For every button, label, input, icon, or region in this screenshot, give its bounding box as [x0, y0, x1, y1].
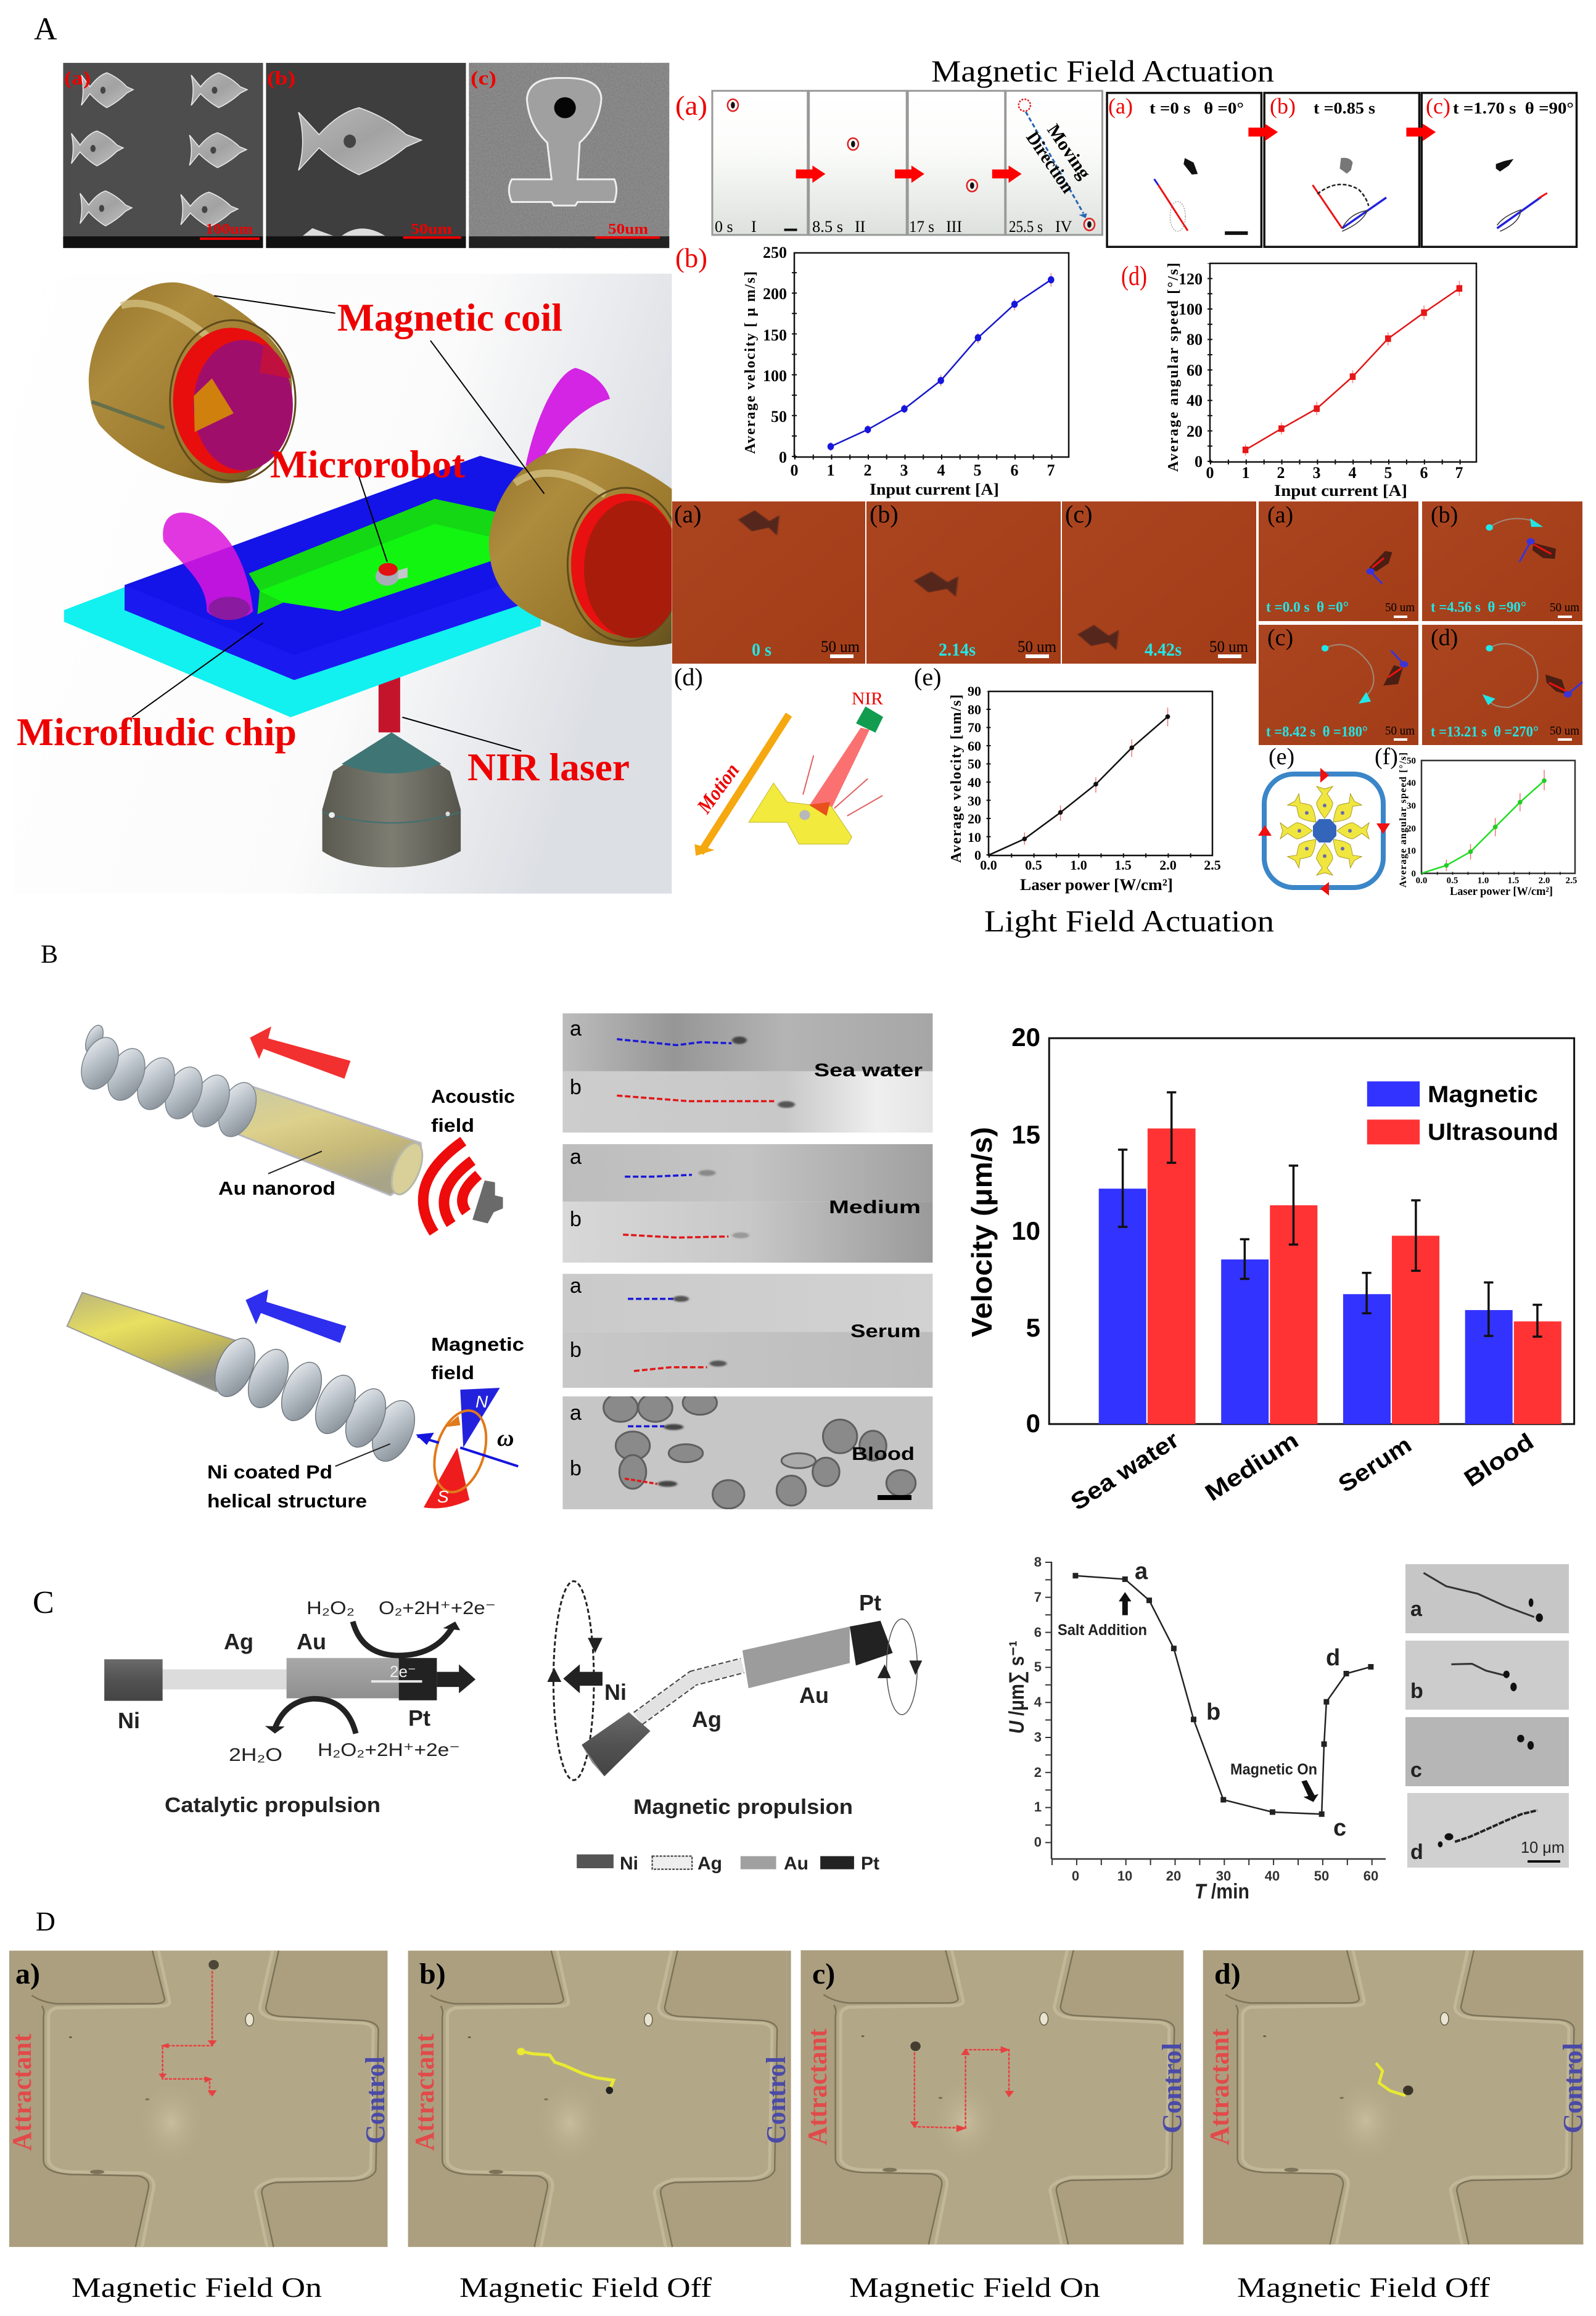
- material legend: Ag: [697, 1853, 722, 1874]
- catalytic propulsion diagram: [104, 1598, 496, 1817]
- arrow: oxidation reaction: [353, 1622, 460, 1655]
- line chart: average angular speed vs input current: 60: [1187, 361, 1203, 379]
- line chart: speed vs time: d: [1326, 1645, 1340, 1671]
- light-driven rotation images: 50 um: [1385, 601, 1415, 614]
- line chart: average velocity vs laser power: 10: [968, 830, 981, 845]
- light-driven rotation images: (b): [1431, 502, 1458, 528]
- SEM images of fish microrobots: 50um: [411, 221, 452, 237]
- light-driven translation images: 2.14s: [939, 640, 976, 660]
- line chart: average angular speed vs laser power: 0.5: [1447, 876, 1458, 886]
- line chart: speed vs time: 20: [1166, 1868, 1181, 1884]
- line chart: speed vs time: 3: [1034, 1729, 1042, 1745]
- magnetic helical robot: Ni coated Pd: [207, 1461, 332, 1483]
- green channel: [249, 499, 498, 614]
- line chart: speed vs time: U /μm∑ s⁻¹: [1005, 1641, 1029, 1734]
- line chart: average velocity vs input current: (b): [675, 243, 707, 273]
- line chart: average angular speed vs laser power: 1.0: [1478, 876, 1489, 886]
- 3D setup: coils, microfluidic chip and NIR laser: [13, 274, 683, 894]
- line chart: average velocity vs laser power: 0.5: [1025, 857, 1042, 873]
- catalytic propulsion diagram: Ag: [224, 1629, 253, 1654]
- magnetic translation time series: 17 s: [909, 218, 934, 236]
- line chart: average velocity vs input current: 3: [900, 461, 908, 479]
- micrograph c: field on: c): [812, 1958, 835, 1990]
- line chart: speed vs time: 7: [1034, 1589, 1042, 1605]
- rotation orbit at Pt end: [887, 1619, 917, 1715]
- line chart: average angular speed vs laser power: 30: [1407, 801, 1416, 811]
- micrograph d: field off: d): [1214, 1958, 1241, 1990]
- chart frame: [1049, 1038, 1574, 1424]
- acoustic helical robot: field: [431, 1115, 474, 1136]
- magnetic propulsion diagram: Pt: [859, 1590, 881, 1615]
- line chart: speed vs time: 30: [1216, 1868, 1231, 1884]
- 3D setup: coils, microfluidic chip and NIR laser: Microfludic chip: [17, 710, 297, 754]
- arrow: electron flow: [371, 1680, 422, 1683]
- icon: magnetic coil left: [89, 282, 295, 483]
- schematic: fish rotation ring: [1258, 744, 1390, 896]
- line chart: average velocity vs laser power: 60: [968, 738, 981, 754]
- catalytic propulsion diagram: O₂+2H⁺+2e⁻: [379, 1598, 496, 1618]
- icon: magenta tube right: [525, 368, 610, 466]
- line chart: average velocity vs input current: 2: [863, 461, 872, 479]
- rotation arrowheads: [547, 1638, 922, 1682]
- magnetic translation time series: 0 s: [715, 218, 733, 236]
- SEM images of fish microrobots: (c): [471, 67, 496, 89]
- micrograph tracks: blood: [562, 1391, 932, 1509]
- micrograph b: field off: Attractant: [409, 2034, 440, 2151]
- icon: nanowire: [104, 1658, 437, 1701]
- SEM images of fish microrobots: (a): [64, 67, 91, 89]
- icon: microrobot: [376, 563, 408, 586]
- icon: gold nanorod: [223, 1087, 429, 1198]
- bar chart: velocity in each medium: 0: [1026, 1409, 1040, 1438]
- line chart: average angular speed vs laser power: 1.5: [1508, 876, 1519, 886]
- line chart: average angular speed vs laser power: 50: [1407, 756, 1416, 766]
- schematic: fish rotation ring: (e): [1269, 744, 1294, 770]
- line chart: average angular speed vs input current: 3: [1312, 464, 1321, 482]
- micrographs a-d of nanowire trajectories: 10 μm: [1521, 1838, 1565, 1857]
- line chart: average angular speed vs laser power: 0.0: [1416, 876, 1427, 886]
- light-driven rotation images: 50 um: [1550, 601, 1579, 614]
- line chart: average angular speed vs input current: 7: [1455, 464, 1463, 482]
- magnetic helical robot: helical structure: [207, 1490, 367, 1512]
- line chart: average velocity vs input current: 200: [763, 285, 787, 303]
- line chart: average angular speed vs laser power: Average angular speed [°/s]: [1398, 752, 1409, 888]
- arrow: reduction reaction: [265, 1699, 356, 1734]
- catalytic propulsion diagram: Au: [297, 1629, 326, 1654]
- schematic: NIR-driven fish motion: [674, 663, 883, 856]
- micrograph tracks: sea water: b: [570, 1076, 582, 1099]
- icon: transducer: [472, 1181, 503, 1224]
- micrograph b: field off: [408, 1951, 791, 2303]
- bar chart: velocity in each medium: Serum: [1334, 1432, 1417, 1498]
- line chart: average angular speed vs laser power: 0: [1411, 869, 1416, 879]
- 3D setup: coils, microfluidic chip and NIR laser: Magnetic coil: [337, 295, 562, 339]
- line chart: average velocity vs input current: 100: [763, 367, 787, 385]
- light-driven rotation images: (c): [1267, 625, 1293, 651]
- blue chip body: [125, 456, 537, 680]
- micrograph tracks: serum: [562, 1274, 932, 1388]
- line chart: average velocity vs laser power: 20: [968, 811, 981, 826]
- catalytic propulsion diagram: Ni: [118, 1708, 140, 1733]
- magnetic translation time series: (a): [675, 91, 707, 121]
- line chart: average velocity vs input current: Input current [A]: [870, 480, 999, 498]
- micrograph b: field off: Control: [761, 2056, 791, 2144]
- micrograph d: field off: [1203, 1950, 1588, 2303]
- catalytic propulsion diagram: Catalytic propulsion: [165, 1794, 380, 1817]
- line chart: average velocity vs laser power: [914, 663, 1221, 894]
- line chart: average angular speed vs laser power: (f): [1375, 744, 1398, 770]
- light-driven rotation images: 50 um: [1385, 724, 1415, 738]
- line chart: average angular speed vs input current: 6: [1420, 464, 1428, 482]
- magnetic translation time series: 8.5 s: [812, 218, 843, 236]
- line chart: average angular speed vs laser power: 20: [1407, 824, 1416, 834]
- line chart: average angular speed vs input current: Average angular speed [°/s]: [1166, 263, 1182, 472]
- legend swatches: [1367, 1081, 1420, 1144]
- micrograph tracks: medium: a: [570, 1145, 582, 1169]
- line chart: speed vs time: 2: [1034, 1765, 1042, 1780]
- line chart: average angular speed vs laser power: 2.5: [1566, 876, 1577, 886]
- line chart: average velocity vs input current: 150: [763, 326, 787, 344]
- line chart: average angular speed vs input current: 20: [1187, 422, 1203, 440]
- bar chart: velocity in each medium: 15: [1011, 1120, 1040, 1149]
- line chart: average angular speed vs input current: 120: [1178, 270, 1203, 288]
- line chart: average velocity vs input current: 250: [763, 244, 787, 262]
- line chart: average velocity vs input current: Average velocity [ μ m/s]: [742, 271, 759, 454]
- micrograph a: field on: [7, 1951, 390, 2303]
- line chart: average velocity vs input current: 0: [779, 448, 787, 466]
- line chart: average angular speed vs laser power: [1375, 744, 1577, 898]
- icon: gold nanorod: [67, 1293, 244, 1391]
- micrograph b: field off: b): [419, 1958, 446, 1990]
- line chart: average angular speed vs input current: 40: [1187, 392, 1203, 410]
- line chart: average velocity vs laser power: 2.0: [1159, 857, 1177, 873]
- light-driven translation images: (c): [1065, 500, 1092, 528]
- magnetic translation time series: II: [855, 218, 865, 236]
- light-driven translation images: (b): [870, 500, 899, 528]
- micrograph tracks: sea water: [562, 1013, 932, 1132]
- magnetic propulsion diagram: [547, 1581, 922, 1819]
- line chart: average velocity vs laser power: 90: [968, 683, 981, 699]
- magnetic helical robot: N: [475, 1392, 488, 1411]
- cyan base plate: [64, 587, 541, 717]
- bar chart: velocity in each medium: 20: [1011, 1023, 1040, 1052]
- light-driven translation images: 50 um: [1018, 638, 1056, 656]
- magnetic rotation time series: t =0 s θ =0°: [1150, 99, 1244, 117]
- icon: rotating magnet: [416, 1388, 518, 1509]
- section label D: D: [36, 1906, 56, 1937]
- line chart: speed vs time: 5: [1034, 1659, 1042, 1675]
- line chart: speed vs time: 6: [1034, 1625, 1042, 1640]
- line chart: average angular speed vs input current: 100: [1178, 300, 1203, 318]
- line chart: average velocity vs laser power: 50: [968, 756, 981, 772]
- panel C: Ni-Ag-Au-Pt nanowire motors: [33, 1554, 1569, 1903]
- magnetic helical robot: [67, 1290, 524, 1512]
- line chart: average velocity vs input current: 7: [1047, 461, 1055, 479]
- SEM images of fish microrobots: (b): [267, 67, 295, 89]
- magnetic rotation time series: [1107, 93, 1577, 247]
- catalytic propulsion diagram: 2H₂O: [229, 1745, 282, 1765]
- line chart: average velocity vs laser power: 0.0: [980, 857, 997, 873]
- icon: helix: [207, 1332, 423, 1468]
- line chart: average angular speed vs input current: 0: [1206, 464, 1214, 482]
- micrograph tracks: serum: b: [570, 1338, 582, 1362]
- light-driven translation images: 4.42s: [1145, 640, 1182, 660]
- magnetic rotation time series: (b): [1270, 94, 1296, 118]
- heading: Light Field Actuation: Light Field Actuation: [984, 904, 1274, 938]
- micrographs a-d of nanowire trajectories: d: [1410, 1840, 1423, 1864]
- micrograph a: field on: Attractant: [7, 2034, 37, 2151]
- magnetic helical robot: field: [431, 1362, 474, 1383]
- schematic: NIR-driven fish motion: NIR: [852, 690, 883, 709]
- material legend: Pt: [861, 1853, 879, 1874]
- ultrasound bars: [1148, 1129, 1561, 1424]
- magnetic rotation time series: t =1.70 s θ =90°: [1453, 99, 1574, 117]
- micrograph tracks: medium: [562, 1144, 932, 1263]
- micrograph tracks: sea water: Sea water: [814, 1060, 923, 1081]
- micrograph tracks: blood: Blood: [852, 1444, 915, 1464]
- micrograph tracks: medium: b: [570, 1208, 582, 1231]
- SEM images of fish microrobots: 50um: [608, 221, 648, 237]
- line chart: average velocity vs input current: 1: [826, 461, 835, 479]
- line chart: average angular speed vs input current: 5: [1384, 464, 1392, 482]
- line chart: average velocity vs laser power: Laser power [W/cm²]: [1020, 876, 1173, 894]
- micrograph c: field on: Attractant: [802, 2029, 833, 2145]
- micrograph d: field off: Control: [1558, 2043, 1588, 2133]
- caption: Magnetic Field On: [849, 2272, 1100, 2303]
- magnetic translation time series: [675, 91, 1102, 236]
- line chart: average angular speed vs input current: 1: [1242, 464, 1249, 482]
- line chart: average velocity vs laser power: 1.5: [1114, 857, 1132, 873]
- line chart: speed vs time: 50: [1314, 1868, 1329, 1884]
- line chart: speed vs time: 60: [1364, 1868, 1378, 1884]
- icon: magenta tube left: [163, 513, 253, 620]
- section label A: A: [34, 12, 57, 47]
- line chart: speed vs time: 0: [1072, 1868, 1079, 1884]
- magnetic rotation time series: (a): [1108, 94, 1133, 118]
- arrow: magnetic propulsion direction: [563, 1664, 603, 1693]
- catalytic propulsion diagram: H₂O₂: [306, 1598, 355, 1618]
- line chart: average velocity vs input current: [675, 243, 1069, 498]
- 3D setup: coils, microfluidic chip and NIR laser: Microrobot: [270, 442, 466, 486]
- magnetic propulsion diagram: Au: [799, 1683, 829, 1708]
- leader lines: [132, 296, 544, 751]
- line chart: speed vs time: c: [1333, 1815, 1346, 1841]
- micrograph a: field on: a): [15, 1958, 40, 1990]
- light-driven translation images: [672, 500, 1256, 664]
- bar chart: velocity in each medium: 10: [1011, 1216, 1040, 1245]
- SEM images of fish microrobots: 100um: [205, 221, 253, 237]
- line chart: average angular speed vs input current: (d): [1121, 261, 1147, 291]
- magnetic bars: [1099, 1189, 1513, 1424]
- line chart: speed vs time: 4: [1034, 1694, 1042, 1710]
- magnetic translation time series: 25.5 s: [1009, 218, 1043, 236]
- light-driven rotation images: (d): [1431, 625, 1458, 651]
- panel D: microchannel chemotaxis: [7, 1906, 1588, 2303]
- micrograph tracks: blood: a: [570, 1401, 582, 1425]
- acoustic helical robot: [74, 1023, 515, 1233]
- line chart: speed vs time: 0: [1034, 1834, 1042, 1850]
- bar chart: velocity in each medium: 5: [1026, 1313, 1040, 1342]
- line chart: average angular speed vs input current: 0: [1195, 453, 1203, 471]
- micrographs a-d of nanowire trajectories: c: [1410, 1758, 1422, 1782]
- icon: NIR laser base: [323, 732, 461, 867]
- heading: Magnetic Field Actuation: Magnetic Field Actuation: [931, 54, 1274, 88]
- caption: Magnetic Field Off: [1237, 2272, 1491, 2303]
- line chart: speed vs time: a: [1135, 1559, 1148, 1585]
- magnetic propulsion diagram: Ag: [692, 1707, 722, 1732]
- light-driven translation images: 50 um: [1209, 638, 1248, 656]
- catalytic propulsion diagram: H₂O₂+2H⁺+2e⁻: [318, 1740, 460, 1760]
- line chart: average velocity vs laser power: Average velocity [um/s]: [948, 694, 965, 863]
- magnetic translation time series: Moving: [1043, 120, 1095, 183]
- micrograph d: field off: Attractant: [1204, 2029, 1235, 2145]
- micrograph tracks: medium: Medium: [829, 1197, 921, 1218]
- light-driven translation images: 50 um: [821, 638, 860, 656]
- arrow: blue motion arrow: [245, 1290, 346, 1343]
- light-driven translation images: (a): [674, 500, 701, 528]
- line chart: average angular speed vs input current: 2: [1277, 464, 1285, 482]
- magnetic rotation time series: t =0.85 s: [1314, 99, 1375, 117]
- line chart: average velocity vs laser power: 70: [968, 720, 981, 735]
- acoustic helical robot: Acoustic: [431, 1086, 515, 1107]
- line chart: average angular speed vs laser power: Laser power [W/cm²]: [1450, 885, 1553, 898]
- line chart: average velocity vs laser power: (e): [914, 663, 941, 691]
- magnetic propulsion diagram: Magnetic propulsion: [633, 1795, 853, 1819]
- icon: bent nanowire: [582, 1621, 893, 1776]
- micrograph tracks: sea water: a: [570, 1017, 582, 1041]
- line chart: average angular speed vs input current: 80: [1187, 331, 1203, 348]
- magnetic translation time series: Direction: [1022, 128, 1079, 197]
- line chart: average velocity vs input current: 5: [973, 461, 982, 479]
- bar chart: velocity in each medium: Medium: [1201, 1427, 1303, 1507]
- light-driven rotation images: t =8.42 s θ =180°: [1266, 724, 1368, 740]
- magnetic translation time series: IV: [1055, 218, 1072, 236]
- line chart: speed vs time: 40: [1265, 1868, 1280, 1884]
- micrograph c: field on: Control: [1157, 2043, 1187, 2133]
- light-driven rotation images: t =13.21 s θ =270°: [1431, 724, 1539, 740]
- magnetic rotation time series: (c): [1426, 94, 1450, 118]
- line chart: average velocity vs laser power: 0: [974, 847, 981, 863]
- magnetic translation time series: I: [751, 218, 757, 236]
- magnetic helical robot: ω: [497, 1425, 514, 1451]
- micrographs a-d of nanowire trajectories: [1405, 1564, 1569, 1868]
- SEM images of fish microrobots: [63, 63, 669, 248]
- line chart: average angular speed vs input current: [1121, 261, 1476, 500]
- catalytic propulsion diagram: Pt: [408, 1705, 430, 1731]
- icon: magnetic coil right: [489, 448, 683, 646]
- acoustic helical robot: Au nanorod: [218, 1177, 335, 1199]
- line chart: average angular speed vs laser power: 2.0: [1539, 876, 1550, 886]
- caption: Magnetic Field Off: [459, 2272, 712, 2303]
- micrographs a-d of nanowire trajectories: b: [1410, 1679, 1423, 1703]
- bar chart: velocity in each medium: [966, 1023, 1574, 1516]
- line chart: speed vs time: 1: [1034, 1799, 1042, 1815]
- micrograph c: field on: [800, 1950, 1187, 2303]
- line chart: average angular speed vs laser power: 10: [1407, 846, 1416, 856]
- line chart: average velocity vs input current: 4: [937, 461, 945, 479]
- panel A: Magnetic and light field actuation: [13, 12, 1582, 938]
- magnetic helical robot: Magnetic: [431, 1333, 524, 1355]
- section label B: B: [41, 941, 58, 969]
- line chart: average velocity vs laser power: 1.0: [1070, 857, 1087, 873]
- material legend: Au: [784, 1853, 808, 1874]
- micrograph a: field on: Control: [360, 2056, 390, 2144]
- line chart: average angular speed vs laser power: 40: [1407, 778, 1416, 788]
- line chart: speed vs time: 10: [1117, 1868, 1132, 1884]
- light-driven rotation images: t =0.0 s θ =0°: [1266, 600, 1349, 616]
- light-driven rotation images: 50 um: [1550, 724, 1579, 738]
- line chart: speed vs time: Magnetic On: [1230, 1761, 1317, 1778]
- panel B: helical microrobots: [41, 941, 1574, 1516]
- catalytic propulsion diagram: 2e⁻: [390, 1662, 416, 1681]
- micrographs a-d of nanowire trajectories: a: [1410, 1597, 1423, 1621]
- magnetic propulsion diagram: Ni: [604, 1679, 627, 1705]
- 3D setup: coils, microfluidic chip and NIR laser: NIR laser: [467, 745, 630, 789]
- light-driven translation images: 0 s: [752, 640, 771, 660]
- dashed rotation orbit at Ni end: [553, 1581, 594, 1780]
- micrograph tracks: serum: a: [570, 1274, 582, 1298]
- light-driven rotation images: t =4.56 s θ =90°: [1431, 600, 1526, 616]
- bar chart: velocity in each medium: Blood: [1460, 1428, 1539, 1493]
- micrograph tracks: blood: b: [570, 1457, 582, 1480]
- line chart: average angular speed vs input current: Input current [A]: [1274, 482, 1407, 500]
- line chart: speed vs time: 8: [1034, 1554, 1042, 1570]
- line chart: speed vs time: [1005, 1554, 1386, 1903]
- line chart: speed vs time: T /min: [1195, 1880, 1249, 1903]
- line chart: average velocity vs laser power: 40: [968, 775, 981, 790]
- line chart: average angular speed vs input current: 4: [1348, 464, 1357, 482]
- light-driven rotation images: [1259, 501, 1582, 745]
- line chart: average velocity vs laser power: 30: [968, 793, 981, 809]
- icon: acoustic waves: [423, 1141, 479, 1233]
- icon: helix: [74, 1023, 263, 1142]
- line chart: average velocity vs laser power: 2.5: [1204, 857, 1221, 873]
- error bars: [1118, 1092, 1542, 1337]
- bar chart: velocity in each medium: Magnetic: [1428, 1082, 1538, 1108]
- caption: Magnetic Field On: [72, 2272, 322, 2303]
- magnetic translation time series: III: [946, 218, 962, 236]
- schematic: NIR-driven fish motion: (d): [674, 663, 703, 691]
- light-driven rotation images: (a): [1267, 502, 1293, 528]
- line chart: average velocity vs laser power: 80: [968, 702, 981, 717]
- bar chart: velocity in each medium: Velocity (μm/s): [966, 1127, 998, 1337]
- arrow: red motion arrow: [250, 1026, 350, 1079]
- schematic: NIR-driven fish motion: Motion: [693, 759, 744, 818]
- line chart: speed vs time: Salt Addition: [1058, 1622, 1147, 1639]
- line chart: average velocity vs input current: 50: [771, 408, 787, 426]
- arrow: propulsion direction: [437, 1664, 475, 1693]
- micrograph tracks: serum: Serum: [850, 1321, 921, 1341]
- line chart: average velocity vs input current: 0: [791, 461, 798, 479]
- section label C: C: [33, 1585, 54, 1620]
- line chart: speed vs time: b: [1206, 1699, 1220, 1725]
- icon: NIR laser stem: [379, 677, 400, 733]
- material legend: [577, 1853, 879, 1874]
- line chart: average velocity vs input current: 6: [1010, 461, 1019, 479]
- bar chart: velocity in each medium: Sea water: [1066, 1427, 1184, 1516]
- bar chart: velocity in each medium: Ultrasound: [1428, 1119, 1558, 1145]
- magnetic helical robot: S: [437, 1487, 449, 1506]
- material legend: Ni: [620, 1853, 638, 1874]
